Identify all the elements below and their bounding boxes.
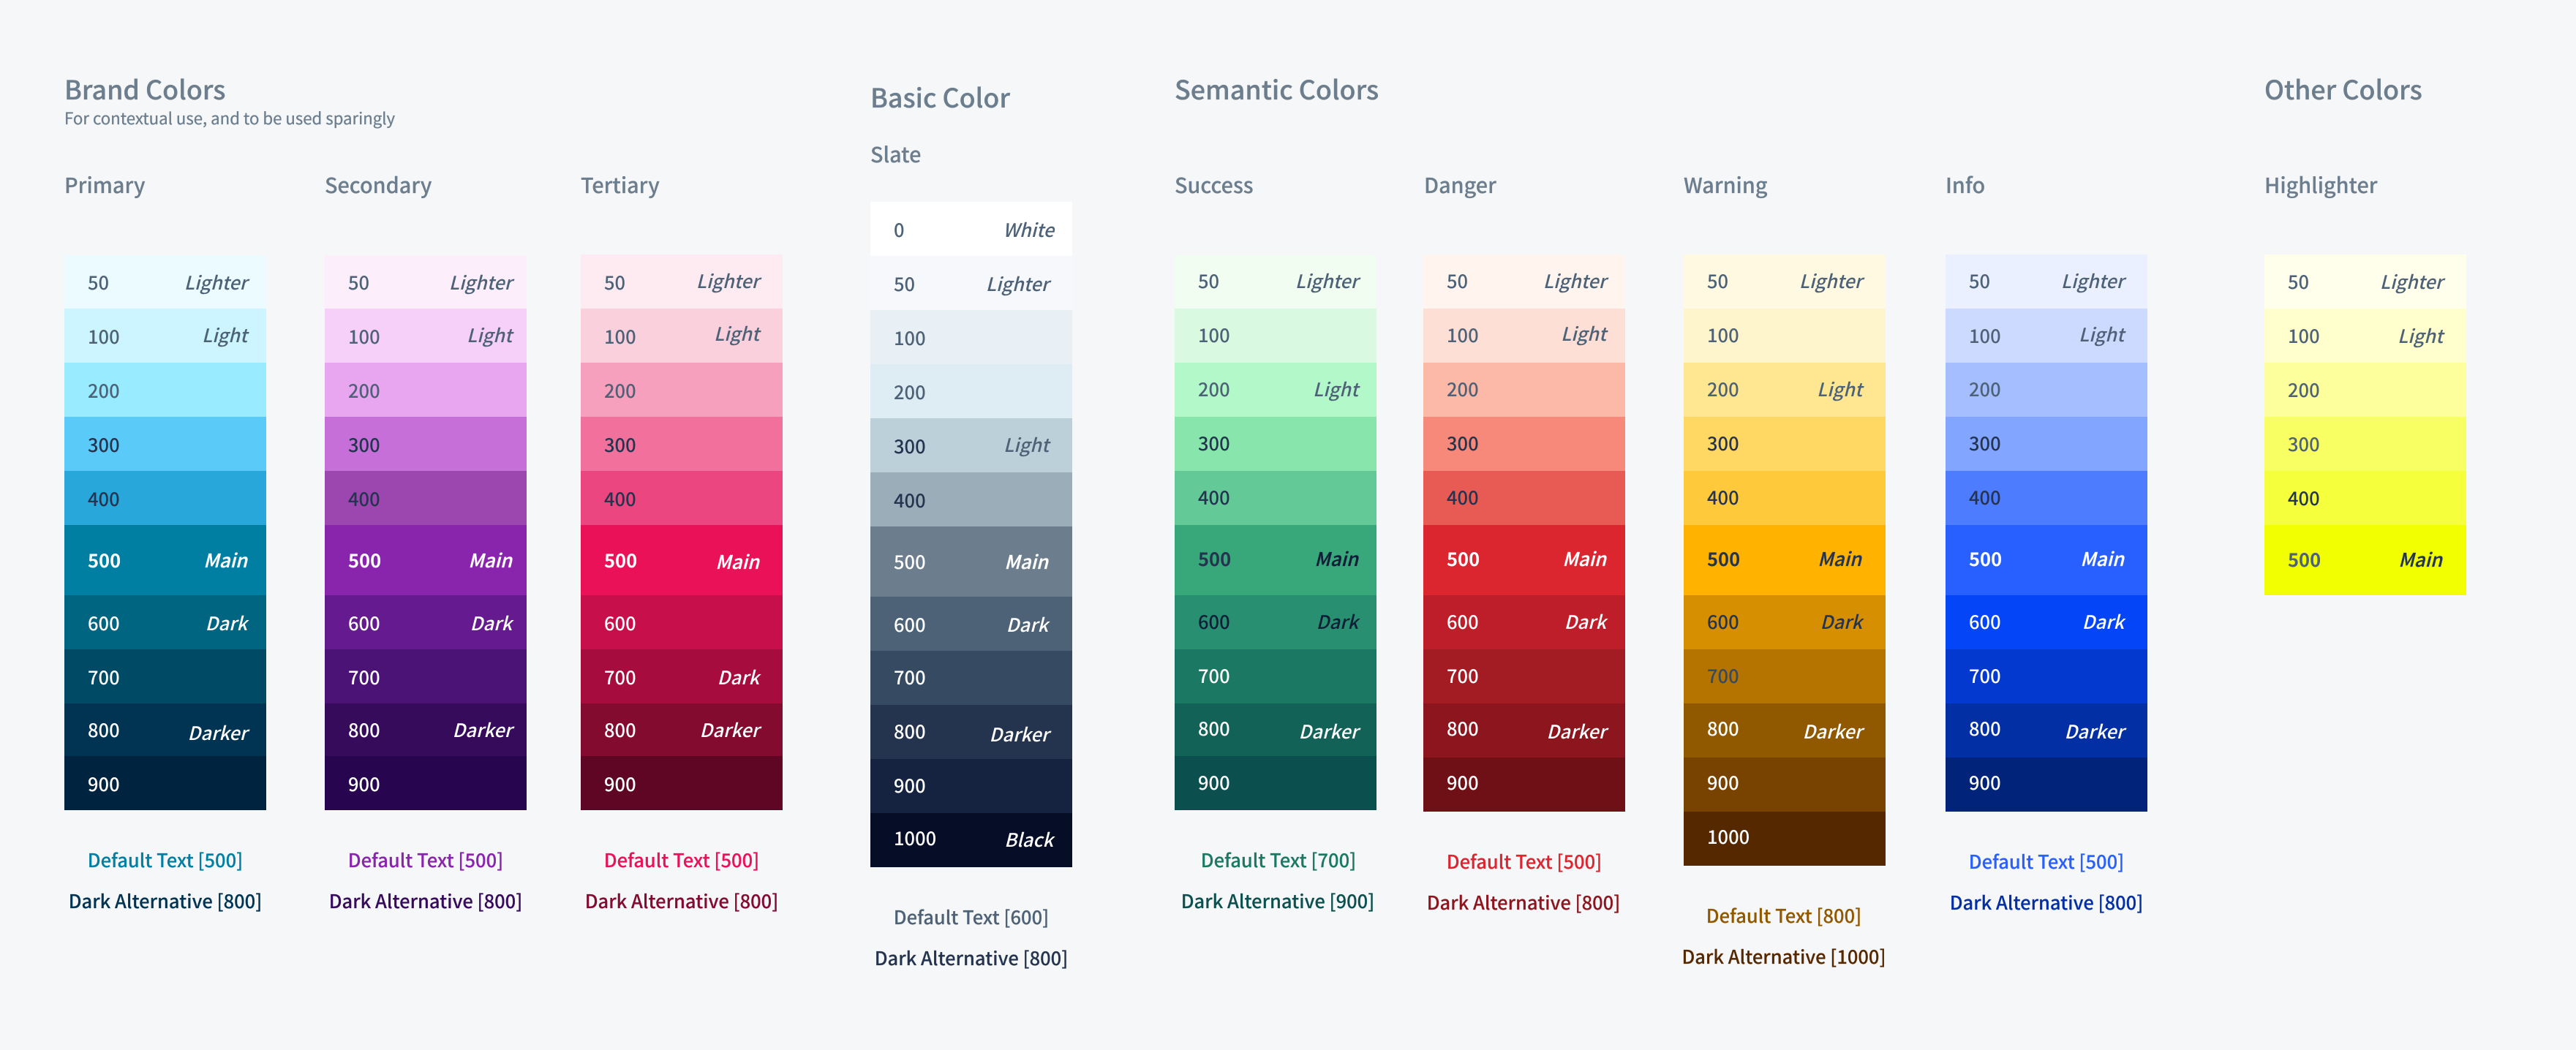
swatch: info 200: 200: [1969, 375, 2001, 402]
swatch: secondary 300: 300: [348, 431, 380, 458]
swatch: warning 700: 700: [1707, 662, 1739, 689]
swatch: warning 500: 500: [1707, 545, 1740, 572]
swatch: slate 0: [870, 202, 1072, 257]
panel: secondary palette: [325, 255, 527, 810]
swatch: primary 700: 700: [88, 663, 120, 690]
swatch: info 200: [1946, 363, 2147, 418]
swatch: info 700: 700: [1969, 662, 2001, 689]
swatch: danger 500: Main: [1562, 545, 1608, 572]
swatch: tertiary 100: Light: [714, 320, 761, 347]
swatch: warning 500: Main: [1818, 545, 1863, 572]
swatch: slate 600: [870, 597, 1072, 651]
heading: Secondary: Secondary: [325, 170, 432, 200]
swatch: secondary 500: Main: [468, 546, 513, 573]
primary dark alternative text: Dark Alternative [800]: [69, 887, 262, 914]
swatch: warning 1000: [1684, 812, 1886, 866]
swatch: danger 600: 600: [1447, 608, 1479, 635]
swatch: info 600: 600: [1969, 608, 2001, 635]
swatch: tertiary 400: 400: [604, 485, 636, 512]
swatch: info 50: 50: [1969, 267, 1990, 294]
panel: info palette: [1946, 254, 2147, 812]
swatch: slate 900: [870, 759, 1072, 814]
swatch: success 50: 50: [1198, 267, 1219, 294]
swatch: tertiary 700: Dark: [718, 664, 761, 690]
swatch: danger 300: [1423, 417, 1625, 472]
swatch: success 200: Light: [1313, 376, 1360, 402]
swatch: secondary 900: [325, 756, 527, 810]
swatch: slate 600: Dark: [1006, 611, 1050, 638]
swatch: warning 200: [1684, 363, 1886, 418]
swatch: danger 400: 400: [1447, 483, 1479, 510]
swatch: secondary 700: [325, 649, 527, 704]
swatch: highlighter 50: [2264, 254, 2466, 309]
swatch: secondary 100: [325, 309, 527, 363]
swatch: info 900: 900: [1969, 768, 2001, 796]
swatch: success 900: 900: [1198, 768, 1230, 796]
swatch: secondary 50: 50: [348, 268, 369, 295]
swatch: success 900: [1175, 756, 1376, 810]
panel: tertiary palette: [581, 254, 783, 810]
heading: Other Colors: Other Colors: [2264, 69, 2422, 107]
swatch: secondary 50: Lighter: [449, 269, 515, 295]
danger default text: Default Text [500]: [1447, 847, 1602, 875]
swatch: secondary 200: 200: [348, 377, 380, 404]
swatch: info 500: 500: [1969, 545, 2002, 572]
swatch: slate 300: [870, 418, 1072, 473]
swatch: primary 800: Darker: [188, 719, 250, 746]
swatch: info 800: 800: [1969, 714, 2001, 741]
swatch: tertiary 500: [581, 525, 783, 596]
swatch: slate 400: 400: [894, 486, 926, 513]
swatch: secondary 500: [325, 525, 527, 596]
swatch: secondary 600: 600: [348, 609, 380, 636]
swatch: secondary 100: 100: [348, 322, 380, 350]
swatch: success 800: 800: [1198, 714, 1230, 741]
swatch: tertiary 100: 100: [604, 322, 636, 350]
swatch: primary 700: [64, 649, 266, 704]
swatch: success 100: [1175, 309, 1376, 363]
swatch: danger 200: [1423, 363, 1625, 418]
swatch: highlighter 100: 100: [2288, 322, 2320, 349]
swatch: primary 50: Lighter: [184, 269, 250, 295]
swatch: success 800: Darker: [1299, 718, 1361, 744]
swatch: slate 200: [870, 364, 1072, 419]
swatch: tertiary 300: [581, 417, 783, 472]
swatch: warning 600: Dark: [1820, 608, 1864, 635]
swatch: danger 100: [1423, 309, 1625, 363]
swatch: info 400: [1946, 471, 2147, 526]
swatch: highlighter 100: [2264, 309, 2466, 363]
swatch: warning 800: [1684, 703, 1886, 758]
heading: Basic Color: Basic Color: [870, 78, 1010, 116]
swatch: danger 500: 500: [1447, 545, 1480, 572]
swatch: success 300: 300: [1198, 429, 1230, 456]
swatch: slate 300: 300: [894, 432, 926, 459]
swatch: warning 900: 900: [1707, 768, 1739, 796]
swatch: tertiary 700: 700: [604, 663, 636, 690]
swatch: info 50: [1946, 254, 2147, 309]
swatch: danger 200: 200: [1447, 375, 1479, 402]
swatch: danger 800: [1423, 703, 1625, 758]
heading: Danger: Danger: [1424, 170, 1496, 200]
swatch: info 700: [1946, 649, 2147, 704]
swatch: warning 400: [1684, 471, 1886, 526]
swatch: slate 50: 50: [894, 270, 915, 297]
swatch: secondary 200: [325, 363, 527, 418]
swatch: primary 200: [64, 363, 266, 418]
primary default text: Default Text [500]: [88, 846, 243, 873]
swatch: info 500: Main: [2080, 545, 2125, 572]
swatch: warning 500: [1684, 525, 1886, 596]
swatch: primary 600: 600: [88, 609, 120, 636]
swatch: danger 900: 900: [1447, 768, 1479, 796]
swatch: success 100: 100: [1198, 321, 1230, 348]
swatch: warning 600: 600: [1707, 608, 1739, 635]
swatch: highlighter 100: Light: [2398, 322, 2445, 349]
swatch: primary 800: 800: [88, 716, 120, 743]
swatch: tertiary 900: [581, 756, 783, 810]
subtitle: brand colors note: For contextual use, and to be used sparingly: [64, 106, 396, 129]
panel: highlighter palette: [2264, 254, 2466, 595]
swatch: info 800: Darker: [2065, 718, 2127, 744]
swatch: warning 50: Lighter: [1799, 268, 1865, 294]
swatch: tertiary 600: [581, 595, 783, 650]
swatch: info 300: [1946, 417, 2147, 472]
heading: Semantic Colors: Semantic Colors: [1175, 69, 1379, 107]
swatch: primary 300: [64, 417, 266, 472]
swatch: danger 700: 700: [1447, 662, 1479, 689]
swatch: success 300: [1175, 417, 1376, 472]
swatch: primary 200: 200: [88, 377, 120, 404]
swatch: secondary 100: Light: [467, 322, 514, 348]
swatch: secondary 800: [325, 703, 527, 757]
swatch: warning 700: [1684, 649, 1886, 704]
swatch: slate 1000: 1000: [894, 824, 936, 851]
swatch: secondary 600: Dark: [470, 610, 514, 636]
danger dark alternative text: Dark Alternative [800]: [1427, 888, 1620, 915]
heading: Success: Success: [1175, 170, 1254, 200]
swatch: slate 300: Light: [1003, 431, 1051, 458]
info dark alternative text: Dark Alternative [800]: [1950, 888, 2143, 915]
swatch: slate 1000: Black: [1004, 826, 1055, 853]
swatch: secondary 600: [325, 595, 527, 650]
swatch: secondary 800: 800: [348, 716, 380, 743]
swatch: secondary 400: 400: [348, 485, 380, 512]
success dark alternative text: Dark Alternative [900]: [1181, 887, 1374, 914]
swatch: danger 100: 100: [1447, 321, 1479, 348]
swatch: danger 800: 800: [1447, 714, 1479, 741]
swatch: slate 100: 100: [894, 324, 926, 351]
swatch: slate 600: 600: [894, 611, 926, 638]
swatch: slate 1000: [870, 813, 1072, 867]
panel: danger palette: [1423, 254, 1625, 812]
swatch: slate 50: Lighter: [986, 271, 1052, 297]
swatch: danger 100: Light: [1561, 320, 1608, 347]
swatch: secondary 300: [325, 417, 527, 472]
swatch: primary 400: [64, 471, 266, 526]
swatch: info 400: 400: [1969, 483, 2001, 510]
success default text: Default Text [700]: [1201, 846, 1356, 873]
swatch: info 100: Light: [2079, 321, 2126, 347]
swatch: highlighter 500: 500: [2288, 545, 2321, 573]
heading: Highlighter: Highlighter: [2264, 170, 2378, 200]
swatch: slate 800: Darker: [990, 721, 1052, 747]
swatch: primary 800: [64, 703, 266, 757]
swatch: info 100: 100: [1969, 322, 2001, 349]
swatch: tertiary 800: [581, 703, 783, 757]
swatch: tertiary 50: 50: [604, 268, 625, 295]
heading: Info: Info: [1946, 170, 1985, 200]
swatch: primary 100: Light: [202, 322, 249, 348]
swatch: secondary 50: [325, 255, 527, 309]
swatch: secondary 800: Darker: [453, 717, 515, 743]
swatch: tertiary 800: 800: [604, 716, 636, 743]
swatch: tertiary 300: 300: [604, 431, 636, 458]
swatch: tertiary 50: [581, 254, 783, 309]
swatch: warning 800: 800: [1707, 714, 1739, 741]
swatch: primary 100: 100: [88, 322, 120, 350]
swatch: highlighter 300: [2264, 417, 2466, 472]
swatch: highlighter 300: 300: [2288, 430, 2320, 457]
tertiary default text: Default Text [500]: [604, 846, 759, 873]
swatch: tertiary 700: [581, 649, 783, 704]
swatch: warning 300: [1684, 417, 1886, 472]
swatch: highlighter 50: Lighter: [2380, 268, 2446, 295]
swatch: info 300: 300: [1969, 429, 2001, 456]
swatch: danger 700: [1423, 649, 1625, 704]
swatch: warning 100: [1684, 309, 1886, 363]
swatch: slate 800: 800: [894, 717, 926, 744]
swatch: highlighter 400: [2264, 471, 2466, 526]
swatch: tertiary 500: 500: [604, 546, 637, 573]
swatch: secondary 700: 700: [348, 663, 380, 690]
swatch: slate 0: White: [1003, 216, 1056, 243]
swatch: highlighter 50: 50: [2288, 268, 2309, 295]
heading: Tertiary: Tertiary: [581, 170, 660, 200]
swatch: warning 300: 300: [1707, 429, 1739, 456]
swatch: danger 900: [1423, 758, 1625, 812]
swatch: tertiary 200: 200: [604, 377, 636, 404]
swatch: info 500: [1946, 525, 2147, 596]
heading: Brand Colors: Brand Colors: [64, 69, 225, 107]
swatch: slate 700: 700: [894, 663, 926, 690]
swatch: success 800: [1175, 703, 1376, 757]
swatch: warning 200: 200: [1707, 375, 1739, 402]
secondary dark alternative text: Dark Alternative [800]: [329, 887, 522, 914]
secondary default text: Default Text [500]: [348, 846, 503, 873]
swatch: slate 100: [870, 310, 1072, 365]
swatch: primary 300: 300: [88, 431, 120, 458]
swatch: success 700: [1175, 649, 1376, 704]
swatch: tertiary 600: 600: [604, 609, 636, 636]
swatch: primary 600: Dark: [206, 610, 249, 636]
swatch: info 100: [1946, 309, 2147, 363]
warning dark alternative text: Dark Alternative [1000]: [1681, 943, 1886, 970]
heading: Slate: Slate: [870, 139, 921, 169]
swatch: primary 600: [64, 595, 266, 650]
swatch: tertiary 50: Lighter: [696, 268, 762, 294]
swatch: primary 500: Main: [203, 546, 249, 573]
swatch: tertiary 200: [581, 363, 783, 418]
swatch: highlighter 500: Main: [2398, 545, 2444, 573]
swatch: slate 50: [870, 256, 1072, 311]
panel: success palette: [1175, 255, 1376, 810]
swatch: danger 600: [1423, 595, 1625, 650]
swatch: success 200: [1175, 363, 1376, 418]
swatch: highlighter 400: 400: [2288, 484, 2320, 511]
swatch: danger 50: [1423, 254, 1625, 309]
panel: slate palette: [870, 202, 1072, 867]
swatch: warning 50: 50: [1707, 267, 1728, 294]
swatch: warning 800: Darker: [1803, 718, 1865, 744]
swatch: warning 600: [1684, 595, 1886, 650]
swatch: success 500: [1175, 525, 1376, 596]
slate default text: Default Text [600]: [894, 903, 1049, 930]
swatch: success 400: 400: [1198, 483, 1230, 510]
slate dark alternative text: Dark Alternative [800]: [875, 944, 1068, 971]
swatch: danger 400: [1423, 471, 1625, 526]
swatch: tertiary 900: 900: [604, 770, 636, 797]
swatch: tertiary 400: [581, 471, 783, 526]
heading: Primary: Primary: [64, 170, 146, 200]
swatch: secondary 900: 900: [348, 770, 380, 797]
swatch: slate 400: [870, 472, 1072, 527]
swatch: slate 900: 900: [894, 771, 926, 798]
info default text: Default Text [500]: [1969, 847, 2124, 875]
swatch: highlighter 500: [2264, 525, 2466, 595]
swatch: primary 900: 900: [88, 770, 120, 797]
swatch: primary 50: 50: [88, 268, 109, 295]
swatch: success 50: [1175, 255, 1376, 309]
swatch: danger 50: 50: [1447, 267, 1468, 294]
swatch: slate 0: 0: [894, 216, 905, 243]
swatch: warning 400: 400: [1707, 483, 1739, 510]
heading: Warning: Warning: [1684, 170, 1768, 200]
swatch: info 600: [1946, 595, 2147, 650]
swatch: warning 50: [1684, 254, 1886, 309]
swatch: highlighter 200: 200: [2288, 376, 2320, 403]
swatch: success 700: 700: [1198, 662, 1230, 689]
panel: warning palette: [1684, 254, 1886, 866]
swatch: slate 700: [870, 651, 1072, 706]
swatch: slate 200: 200: [894, 378, 926, 405]
swatch: slate 500: [870, 526, 1072, 597]
swatch: danger 300: 300: [1447, 429, 1479, 456]
swatch: info 600: Dark: [2082, 608, 2126, 635]
swatch: primary 50: [64, 255, 266, 309]
swatch: slate 800: [870, 705, 1072, 760]
swatch: info 800: [1946, 703, 2147, 758]
warning default text: Default Text [800]: [1706, 902, 1861, 929]
swatch: warning 900: [1684, 758, 1886, 812]
swatch: danger 50: Lighter: [1543, 268, 1609, 294]
swatch: success 500: Main: [1314, 545, 1360, 572]
swatch: success 600: [1175, 595, 1376, 650]
swatch: success 50: Lighter: [1295, 268, 1361, 294]
swatch: danger 500: [1423, 525, 1625, 596]
swatch: warning 1000: 1000: [1707, 823, 1750, 850]
swatch: info 50: Lighter: [2061, 268, 2127, 294]
swatch: primary 500: [64, 525, 266, 596]
swatch: slate 500: Main: [1004, 548, 1050, 575]
swatch: primary 900: [64, 756, 266, 810]
swatch: success 600: Dark: [1317, 608, 1360, 635]
swatch: danger 600: Dark: [1564, 608, 1608, 635]
swatch: success 500: 500: [1198, 545, 1231, 572]
panel: primary palette: [64, 255, 266, 810]
swatch: tertiary 500: Main: [715, 548, 761, 575]
swatch: success 400: [1175, 471, 1376, 526]
swatch: success 200: 200: [1198, 375, 1230, 402]
swatch: primary 500: 500: [88, 546, 121, 573]
tertiary dark alternative text: Dark Alternative [800]: [585, 887, 778, 914]
swatch: primary 100: [64, 309, 266, 363]
swatch: tertiary 100: [581, 309, 783, 363]
swatch: primary 400: 400: [88, 485, 120, 512]
swatch: danger 800: Darker: [1547, 718, 1609, 744]
swatch: highlighter 200: [2264, 363, 2466, 418]
swatch: success 600: 600: [1198, 608, 1230, 635]
swatch: info 900: [1946, 758, 2147, 812]
swatch: warning 100: 100: [1707, 321, 1739, 348]
swatch: tertiary 800: Darker: [700, 717, 762, 743]
swatch: secondary 500: 500: [348, 546, 381, 573]
swatch: secondary 400: [325, 471, 527, 526]
swatch: warning 200: Light: [1817, 376, 1864, 402]
swatch: slate 500: 500: [894, 548, 926, 575]
